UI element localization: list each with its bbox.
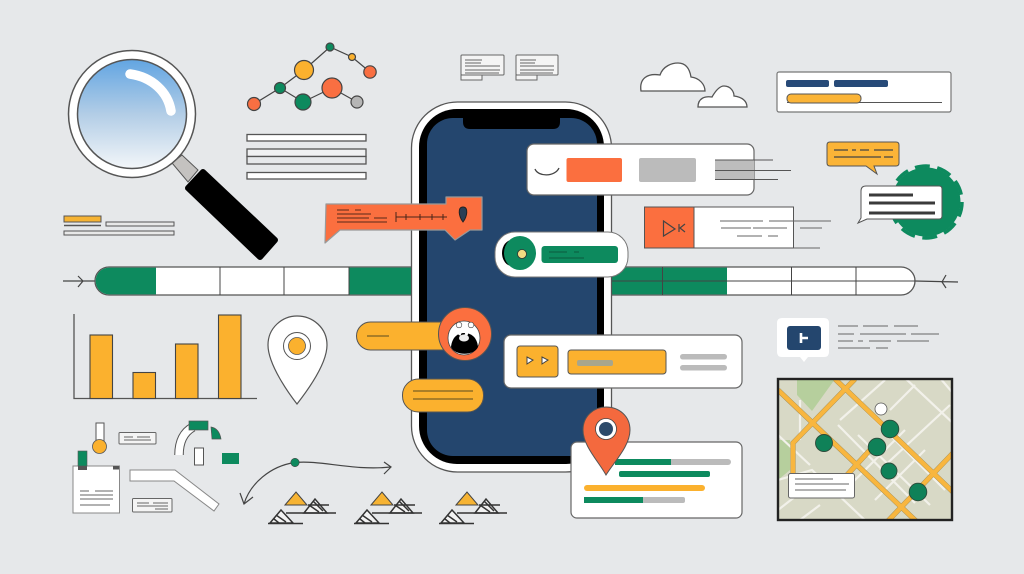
- callout: yellow bubble: [827, 142, 899, 174]
- map: [778, 378, 955, 525]
- bar chart: [74, 314, 257, 398]
- panel: green location pill: [495, 232, 628, 277]
- callout: map label: [788, 474, 854, 498]
- icon: navigation badge: [777, 318, 829, 362]
- icon: bent white road strip: [130, 470, 219, 511]
- callout: orange map label: [325, 197, 482, 243]
- icon: magnifying glass: [68, 50, 275, 257]
- icon: avatar: [438, 308, 492, 360]
- icon: mountains group 1: [268, 492, 336, 524]
- icon: mountains group 3: [439, 492, 507, 524]
- icon: gear with speech bubbles: [827, 142, 962, 238]
- callout: white bubble: [858, 186, 942, 223]
- panel: top right progress card: [777, 72, 951, 112]
- text block: small label card: [119, 432, 156, 444]
- timeline bar: [63, 267, 958, 295]
- text block: small label card lower: [132, 498, 172, 512]
- panel: media control card: [504, 335, 742, 388]
- icon: white marker: [875, 403, 887, 415]
- text block: small yellow label rows: [64, 216, 174, 235]
- text block: lines beside badge: [838, 326, 939, 348]
- icon: thermometer: [92, 423, 106, 454]
- panel: card with orange and grey buttons: [527, 144, 791, 195]
- icon: clipboard document: [73, 451, 120, 513]
- icon: clouds: [641, 63, 747, 107]
- icon: white location pin: [268, 316, 327, 404]
- icon: play: [664, 221, 685, 236]
- icon: green markers: [816, 420, 927, 501]
- icon: smile: [535, 168, 559, 175]
- icon: mountains group 2: [354, 492, 422, 524]
- panel: video card with play icon: [644, 207, 831, 248]
- chart: network line graph: [248, 43, 376, 110]
- icon: small pin: [459, 207, 467, 222]
- panel: yellow pill with avatar: [356, 308, 492, 360]
- icon: arc gauge: [179, 421, 239, 465]
- icon: document cards top: [461, 55, 558, 80]
- text block: outlined list rows: [247, 134, 366, 179]
- arrow: curved route: [240, 458, 391, 504]
- phone: [412, 102, 612, 472]
- panel: progress list card: [571, 442, 742, 518]
- icon: orange location pin: [583, 407, 630, 475]
- panel: yellow message pill: [402, 379, 484, 412]
